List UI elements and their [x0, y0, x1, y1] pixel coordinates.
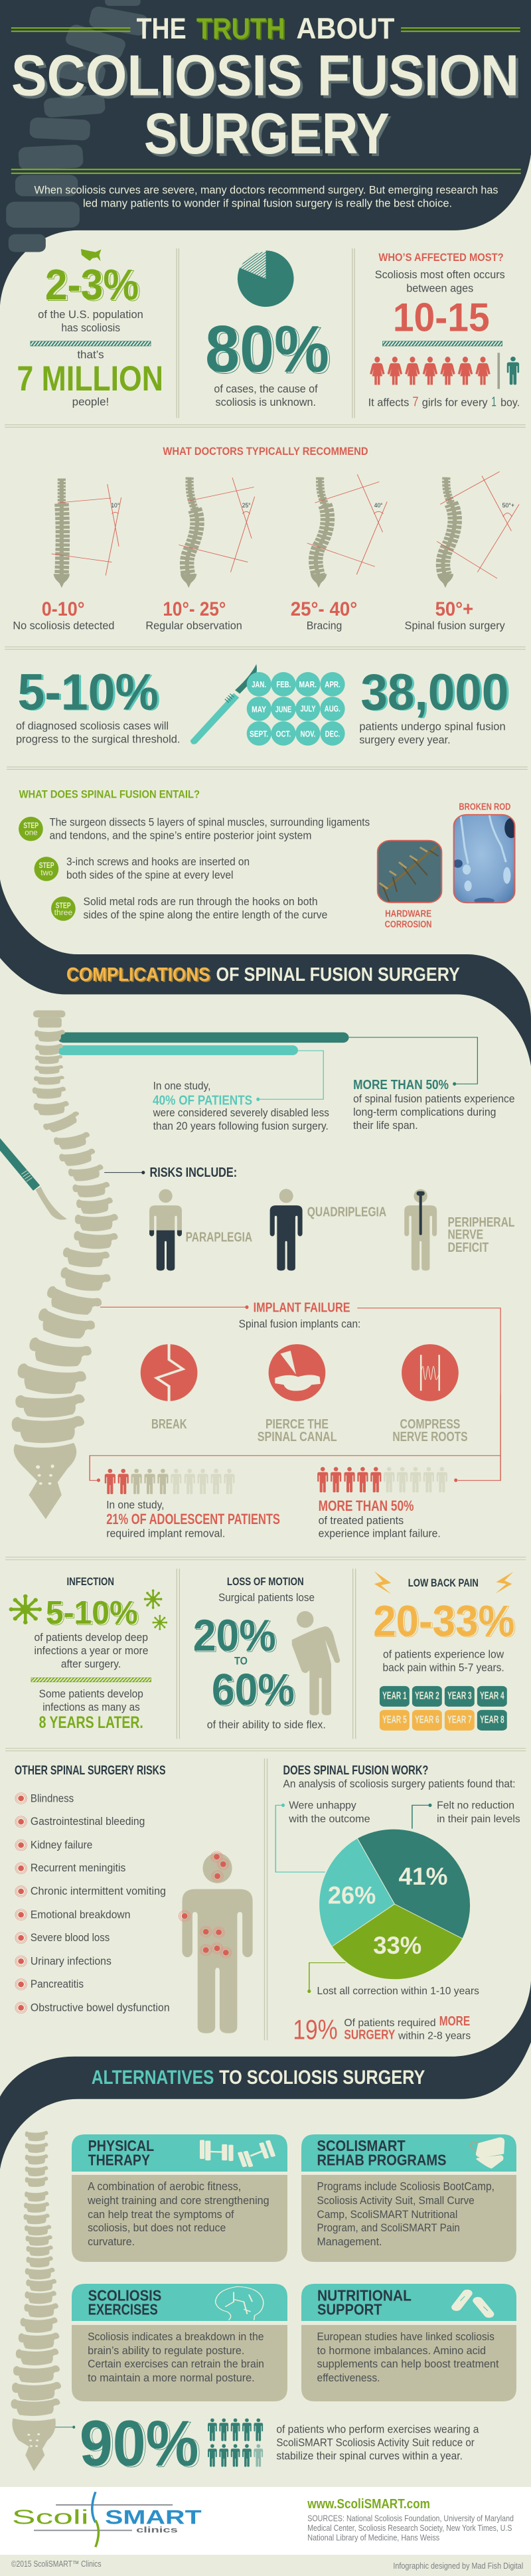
calendar months: MAY [252, 704, 267, 714]
step two: 3-inch screws and hooks are inserted on [66, 855, 250, 868]
angle lines: 50 degrees [437, 472, 519, 578]
labels: curve ranges: 10°- 25° [163, 598, 226, 620]
list: risks: Urinary infections [31, 1955, 112, 1968]
card: scolismart rehab programs: SCOLISMART [317, 2137, 406, 2154]
text: more than 50 percent implant failure [319, 1498, 441, 1540]
icons: 90 percent people [208, 2419, 263, 2467]
calendar months [247, 672, 345, 746]
icons: 21 percent people [105, 1469, 234, 1494]
bars and connector lines [58, 1032, 477, 1101]
ribbon: complications heading [0, 879, 531, 1066]
spine: 10-25 degrees [181, 477, 197, 588]
stat: 19 percent more surgery: 19% [293, 2015, 338, 2045]
stat: 90 percent [55, 2407, 201, 2480]
icon: paraplegia: PARAPLEGIA [186, 1229, 252, 1245]
icon: pierce the spinal canal [269, 1344, 325, 1401]
panel: other spinal surgery risks [15, 1763, 253, 2033]
calendar months: JAN. [252, 679, 266, 689]
step two: two [40, 869, 53, 877]
list: risks: Severe blood loss [31, 1932, 110, 1944]
icon: body with pain points [179, 1851, 253, 2033]
pie chart: outcomes [319, 1829, 471, 1980]
panel: who is affected statistics [5, 248, 526, 458]
title: THE [137, 13, 187, 45]
card: nutritional support: effectiveness. [317, 2371, 380, 2384]
step one: and tendons, and the spine’s entire posterior joint system [49, 829, 311, 841]
spine: 50+ degrees [437, 477, 455, 588]
text: website and sources [307, 2496, 514, 2543]
step three [51, 895, 327, 921]
icon: quadriplegia [270, 1189, 386, 1270]
labels: curve ranges [13, 598, 505, 632]
text: more than 50 percent: their life span. [353, 1119, 418, 1132]
icon: scalpel [190, 664, 257, 744]
year boxes: YEAR 3 [447, 1690, 472, 1701]
panel: complications [0, 879, 531, 1540]
loss of motion column [193, 1576, 340, 1731]
loss of motion column: LOSS OF MOTION [227, 1576, 304, 1588]
text: 40 percent of patients [153, 1080, 329, 1132]
stat: who's affected most [375, 251, 505, 346]
icon: peripheral nerve deficit [404, 1189, 515, 1270]
loss of motion column: 60% [212, 1665, 295, 1714]
loss of motion column: 20% [194, 1612, 277, 1661]
card: scolismart rehab programs: Management. [317, 2235, 382, 2248]
icon: scalpel [0, 1138, 67, 1220]
calendar months: NOV. [301, 729, 316, 738]
stat: 5-10% progress: progress to the surgical threshold. [16, 733, 180, 745]
panel: recommendations by curve [5, 472, 528, 930]
labels: implant failures: BREAK [151, 1417, 187, 1431]
list: risks: Emotional breakdown [31, 1909, 130, 1921]
title: SURGERY [147, 104, 392, 168]
step one: STEP [23, 821, 38, 830]
ribbon: complications heading: COMPLICATIONS [66, 964, 210, 985]
stat: 5-10% progress: of diagnosed scoliosis cases will [16, 720, 169, 732]
ratio text [368, 394, 520, 409]
photo: hardware corrosion: CORROSION [385, 918, 432, 930]
pie labels: 33% [373, 1932, 421, 1960]
step three: Solid metal rods are run through the hooks on both [84, 895, 318, 908]
stat: 19 percent more surgery [293, 2014, 471, 2045]
icon: USA map [81, 249, 102, 261]
labels: curve ranges: Regular observation [145, 619, 242, 632]
stat: 19 percent more surgery: SURGERY [344, 2027, 395, 2042]
callout: unhappy with outcome: Were unhappy [289, 1800, 356, 1812]
angle labels [111, 502, 514, 509]
title: TRUTH [198, 14, 287, 46]
implant connector lines [90, 1395, 500, 1482]
infection column: 8 YEARS LATER. [39, 1713, 143, 1732]
stat: 19 percent more surgery: MORE [439, 2014, 470, 2029]
calendar months: AUG. [325, 703, 341, 713]
labels: implant failures [151, 1417, 468, 1444]
heading: risks include [104, 1164, 237, 1180]
stat: 80% unknown cause [205, 312, 331, 408]
calendar months: DEC. [325, 729, 340, 738]
year boxes: YEAR 7 [447, 1714, 472, 1725]
text: website and sources: www.ScoliSMART.com [307, 2496, 430, 2512]
list: risks: Recurrent meningitis [31, 1862, 125, 1874]
step one: The surgeon dissects 5 layers of spinal muscles, surrounding ligaments [49, 816, 370, 828]
infection column: after surgery. [61, 1658, 121, 1670]
calendar months: OCT. [276, 729, 291, 738]
card: nutritional support: SUPPORT [317, 2301, 382, 2318]
card: scoliosis exercises: brain’s ability to regulate posture. [88, 2344, 244, 2357]
icon: compress nerve roots [402, 1344, 459, 1401]
text: 21 percent adolescent patients: required implant removal. [106, 1527, 225, 1540]
card: physical therapy: can help treat the symptoms of [88, 2208, 234, 2221]
loss of motion column: 60% [213, 1666, 296, 1715]
icon: bottom spine [11, 2131, 61, 2471]
calendar months: FEB. [276, 679, 291, 689]
card: scoliosis exercises: Scoliosis indicates a breakdown in the [88, 2330, 264, 2343]
stat: 2-3% of population: of the U.S. population [38, 308, 143, 321]
heading: what doctors recommend: WHAT DOCTORS TYPICALLY RECOMMEND [163, 445, 368, 458]
calendar months: SEPT. [250, 729, 268, 738]
pie chart: 80 percent [238, 250, 294, 307]
title: ABOUT [296, 13, 394, 45]
text: 40 percent of patients: In one study, [153, 1080, 210, 1092]
year boxes: YEAR 8 [480, 1714, 504, 1725]
step two: STEP [39, 861, 54, 870]
card: scoliosis exercises: Certain exercises can retrain the brain [88, 2358, 264, 2370]
card: scolismart rehab programs: REHAB PROGRAMS [317, 2152, 446, 2169]
year boxes: YEAR 2 [415, 1690, 439, 1701]
panel: alternatives [11, 2131, 516, 2480]
text: more than 50 percent implant failure: of treated patients [319, 1514, 404, 1527]
loss of motion column: TO [234, 1655, 248, 1668]
infection column: of patients develop deep [35, 1632, 148, 1644]
callout: no pain reduction [412, 1800, 520, 1829]
low back pain column [373, 1571, 516, 1674]
logo: ScoliSMART clinics: SMART [105, 2506, 202, 2528]
card: scoliosis exercises: SCOLIOSIS [88, 2287, 161, 2304]
ratio text: girls for every [422, 396, 488, 408]
spine: 0-10 degrees [54, 479, 70, 588]
photo: broken rod x-ray [453, 802, 518, 904]
text: website and sources: National Library of Medicine, Hans Weiss [307, 2533, 439, 2543]
calendar months: APR. [325, 679, 341, 689]
labels: implant failures: NERVE ROOTS [392, 1429, 468, 1444]
heading: other spinal surgery risks: OTHER SPINAL SURGERY RISKS [15, 1763, 165, 1777]
card: physical therapy: A combination of aerobic fitness, [88, 2180, 241, 2193]
callout: unhappy with outcome [275, 1800, 370, 1872]
column dividers [5, 248, 526, 427]
infection column: infections as many as [42, 1701, 140, 1713]
icons: 50 percent people [317, 1467, 447, 1492]
angle labels: 40° [374, 502, 383, 509]
card: scoliosis exercises: to maintain a more normal posture. [88, 2371, 255, 2384]
card: physical therapy [72, 2134, 287, 2262]
calendar months: JULY [301, 703, 316, 713]
icon: peripheral nerve deficit: NERVE [447, 1227, 483, 1242]
low back pain column: LOW BACK PAIN [408, 1577, 479, 1589]
heading: does spinal fusion work [283, 1763, 516, 1790]
list: risks: Blindness [31, 1792, 74, 1805]
year boxes [380, 1686, 507, 1731]
stat: 2-3% of population: people! [72, 396, 109, 408]
panel: does spinal fusion work [0, 1759, 531, 2169]
card: scolismart rehab programs: Camp, ScoliSMART Nutritional [317, 2208, 457, 2221]
angle lines: 25 degrees [179, 477, 255, 572]
text: 21 percent adolescent patients: In one study, [106, 1499, 164, 1511]
loss of motion column: 20% [193, 1610, 276, 1660]
year boxes: YEAR 5 [382, 1714, 407, 1725]
card: scoliosis exercises [72, 2284, 287, 2401]
ratio text: boy. [500, 396, 520, 408]
stat: 19 percent more surgery: Of patients required [344, 2017, 436, 2029]
icon: large spine [14, 1010, 118, 1399]
text: copyright: ©2015 ScoliSMART™ Clinics [11, 2559, 102, 2569]
angle lines: 40 degrees [307, 474, 387, 574]
ribbon: alternatives heading: ALTERNATIVES [92, 2067, 214, 2089]
stat: 2-3% of population: 2-3% [45, 260, 139, 309]
card: nutritional support: NUTRITIONAL [317, 2287, 412, 2304]
infection column: infections a year or more [35, 1645, 148, 1657]
labels: curve ranges: No scoliosis detected [13, 619, 114, 632]
stat: 38,000 patients: surgery every year. [359, 734, 451, 746]
infection column: 5-10% [47, 1596, 139, 1632]
card: physical therapy: weight training and core strengthening [87, 2194, 269, 2207]
labels: implant failures: PIERCE THE [266, 1417, 329, 1431]
ratio text: It affects [368, 396, 409, 408]
step two [35, 855, 250, 881]
list: risks: Chronic intermittent vomiting [31, 1885, 166, 1897]
stat: 38,000 patients [359, 663, 510, 746]
logo: ScoliSMART clinics [12, 2492, 202, 2547]
stat: 2-3% of population: has scoliosis [61, 321, 120, 334]
ratio text: 7 [412, 394, 419, 409]
header background [0, 0, 531, 305]
stat: 80% unknown cause: of cases, the cause of [214, 383, 318, 395]
card: physical therapy: PHYSICAL [88, 2137, 154, 2154]
step three: three [54, 908, 72, 917]
intro text: led many patients to wonder if spinal fusion surgery is really the best choice. [83, 197, 452, 209]
panel: infection, motion, back pain [5, 1557, 526, 1751]
labels: implant failures: SPINAL CANAL [258, 1429, 337, 1444]
text: more than 50 percent: MORE THAN 50% [353, 1077, 449, 1092]
stat: 5-10% progress: 5-10% [20, 665, 161, 721]
stat: who's affected most: Scoliosis most often occurs [375, 268, 505, 281]
logo: ScoliSMART clinics: Scoli [12, 2506, 89, 2528]
ribbon: alternatives heading [0, 1981, 531, 2169]
list: risks: Gastrointestinal bleeding [31, 1816, 145, 1828]
stat: 2-3% of population: 2-3% [46, 262, 141, 310]
icon: dumbbells [200, 2140, 275, 2168]
card: physical therapy: scoliosis, but does not reduce [88, 2221, 226, 2234]
stat: 90 percent: 90% [82, 2408, 201, 2480]
text: 90 percent description [276, 2423, 479, 2462]
ratio text: 1 [491, 394, 496, 409]
callout: unhappy with outcome: with the outcome [288, 1813, 370, 1825]
stat: 90 percent: 90% [80, 2407, 198, 2480]
infection column [9, 1576, 167, 1732]
stat: 80% unknown cause: scoliosis is unknown. [215, 396, 316, 408]
calendar months: MAR. [299, 679, 317, 689]
icon: brain [215, 2286, 264, 2320]
title [11, 13, 522, 168]
icon: faded spine [6, 0, 149, 252]
icon: pills [457, 2293, 489, 2314]
text: more than 50 percent [353, 1077, 515, 1132]
icon: quadriplegia: QUADRIPLEGIA [307, 1204, 386, 1219]
loss of motion column: of their ability to side flex. [207, 1719, 326, 1731]
angle lines: 10 degrees [52, 484, 121, 576]
logo: ScoliSMART clinics: clinics [136, 2526, 178, 2535]
heading: what does spinal fusion entail: WHAT DOES SPINAL FUSION ENTAIL? [19, 788, 200, 800]
year boxes: YEAR 6 [415, 1714, 439, 1725]
spine: 25-40 degrees [311, 477, 327, 588]
panel: header banner [0, 0, 531, 305]
panel: footer [0, 2487, 531, 2571]
photo: hardware corrosion [378, 841, 441, 930]
card: scoliosis exercises: EXERCISES [88, 2301, 158, 2318]
card: physical therapy: curvature. [88, 2235, 135, 2248]
icons: seven girls and one boy [370, 353, 519, 389]
list: risks: Pancreatitis [31, 1978, 84, 1990]
title: TRUTH [196, 13, 285, 45]
labels: curve ranges: 25°- 40° [291, 598, 357, 620]
stat: 2-3% of population [17, 260, 163, 408]
text: more than 50 percent implant failure: MORE THAN 50% [319, 1498, 414, 1514]
labels: curve ranges: 0-10° [42, 598, 85, 620]
step one [19, 816, 370, 841]
text: 21 percent adolescent patients: 21% OF ADOLESCENT PATIENTS [106, 1510, 280, 1527]
stat: 5-10% progress: 5-10% [18, 663, 159, 721]
pie labels: 26% [328, 1882, 376, 1909]
stat: 80% unknown cause: 80% [207, 313, 331, 387]
pie labels: 41% [399, 1863, 447, 1890]
loss of motion column: Surgical patients lose [218, 1592, 315, 1604]
stat: who's affected most: between ages [406, 282, 473, 294]
heading: does spinal fusion work: DOES SPINAL FUSION WORK? [283, 1763, 428, 1777]
step three: sides of the spine along the entire length of the curve [84, 908, 327, 921]
labels: curve ranges: Spinal fusion surgery [405, 619, 505, 632]
labels: curve ranges: 50°+ [435, 598, 473, 620]
stat: 38,000 patients: patients undergo spinal fusion [359, 721, 506, 732]
year boxes: YEAR 4 [480, 1690, 504, 1701]
title: SURGERY [144, 101, 390, 166]
title line decorations [11, 27, 521, 174]
text: more than 50 percent: long-term complications during [353, 1106, 496, 1118]
step one: one [25, 828, 38, 837]
angle labels: 25° [242, 502, 251, 509]
heading: implant failure: Spinal fusion implants can: [239, 1318, 360, 1330]
card: nutritional support [301, 2284, 516, 2401]
heading: risks include: RISKS INCLUDE: [150, 1164, 237, 1180]
callout: lost all correction [307, 1963, 479, 1997]
infection column: Some patients develop [39, 1688, 143, 1700]
list: risks [15, 1792, 170, 2014]
heading: implant failure [100, 1300, 500, 1395]
stat: 2-3% of population: 7 MILLION [17, 359, 163, 398]
icon: spine base and sacrum [12, 1395, 85, 1519]
year boxes: YEAR 1 [382, 1690, 407, 1701]
text: 21 percent adolescent patients [106, 1499, 280, 1540]
stat: 80% unknown cause: 80% [205, 312, 329, 386]
step three: STEP [56, 901, 71, 910]
stat: 19 percent more surgery: within 2-8 years [398, 2030, 471, 2042]
infection column: INFECTION [67, 1576, 114, 1588]
text: 40 percent of patients: than 20 years following fusion surgery. [153, 1120, 329, 1132]
infection column: 5-10% [46, 1595, 138, 1631]
labels: implant failures: COMPRESS [400, 1417, 460, 1431]
card: physical therapy: THERAPY [88, 2152, 150, 2169]
icon: break [141, 1343, 197, 1402]
angle labels: 50°+ [502, 502, 514, 509]
text: 40 percent of patients: were considered severely disabled less [153, 1106, 329, 1119]
stat: who's affected most: 10-15 [393, 295, 490, 340]
pie labels [328, 1863, 447, 1960]
photo: hardware corrosion: HARDWARE [385, 908, 431, 919]
icon: peripheral nerve deficit: DEFICIT [447, 1239, 489, 1254]
list: risks: Obstructive bowel dysfunction [31, 2002, 170, 2014]
angle labels: 10° [111, 502, 119, 509]
ribbon: complications heading: COMPLICATIONS [68, 964, 211, 986]
stat: 2-3% of population: that’s [77, 348, 104, 361]
calendar months: JUNE [275, 704, 291, 714]
ribbon: complications heading: OF SPINAL FUSION SURGERY [216, 964, 460, 985]
step two: both sides of the spine at every level [66, 869, 234, 881]
icon: dog tags [471, 2137, 504, 2169]
heading: implant failure: IMPLANT FAILURE [254, 1300, 350, 1315]
card: scolismart rehab programs [301, 2134, 516, 2262]
icon: paraplegia [149, 1189, 252, 1270]
list: risks: Kidney failure [31, 1839, 92, 1851]
labels: curve ranges: Bracing [307, 619, 342, 632]
stat: 5-10% progress [16, 663, 180, 745]
text: 40 percent of patients: 40% OF PATIENTS [153, 1092, 252, 1108]
text: more than 50 percent implant failure: experience implant failure. [319, 1527, 441, 1540]
intro text [35, 184, 498, 209]
